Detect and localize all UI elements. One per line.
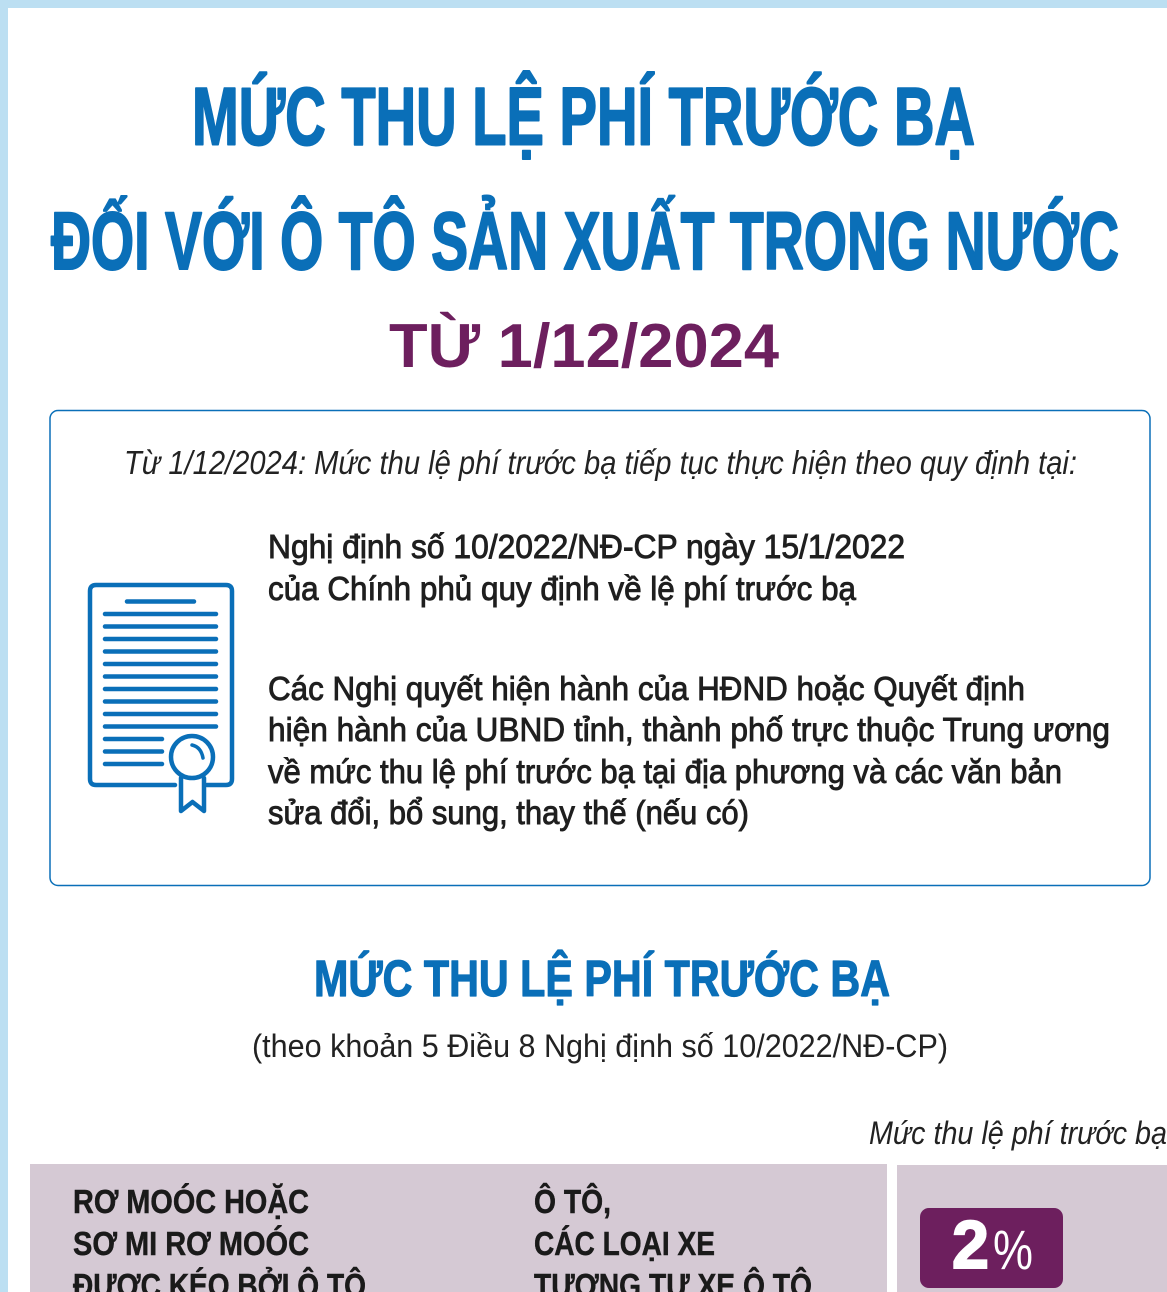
resolutions text: Các Nghị quyết hiện hành của HĐND hoặc Quyết định (268, 670, 1025, 707)
rate badge: 2 (952, 1207, 989, 1283)
decree text: của Chính phủ quy định về lệ phí trước bạ (268, 570, 857, 607)
section heading: MỨC THU LỆ PHÍ TRƯỚC BẠ (314, 949, 890, 1007)
cars label (534, 1182, 812, 1292)
decree text: Nghị định số 10/2022/NĐ-CP ngày 15/1/2022 (268, 528, 905, 565)
rate badge (920, 1207, 1063, 1288)
resolutions text: về mức thu lệ phí trước bạ tại địa phương và các văn bản (268, 753, 1062, 790)
title (51, 72, 1119, 287)
icon: certificate document (90, 585, 232, 811)
trailers label (73, 1183, 366, 1292)
panel: vehicle types (30, 1164, 887, 1292)
resolutions text (268, 670, 1110, 831)
resolutions text: hiện hành của UBND tỉnh, thành phố trực thuộc Trung ương (268, 711, 1110, 748)
trailers label: RƠ MOÓC HOẶC (73, 1183, 309, 1220)
date subtitle: TỪ 1/12/2024 (389, 312, 780, 381)
decree text (268, 528, 905, 607)
section subheading: (theo khoản 5 Điều 8 Nghị định số 10/2022/NĐ-CP) (252, 1028, 948, 1064)
cars label: CÁC LOẠI XE (534, 1225, 715, 1262)
panel: rate (897, 1165, 1167, 1292)
trailers label: SƠ MI RƠ MOÓC (73, 1225, 309, 1262)
rate badge: % (993, 1218, 1033, 1281)
cars label: Ô TÔ, (534, 1182, 611, 1220)
panel: legal basis (50, 410, 1150, 886)
resolutions text: sửa đổi, bổ sung, thay thế (nếu có) (268, 794, 749, 831)
